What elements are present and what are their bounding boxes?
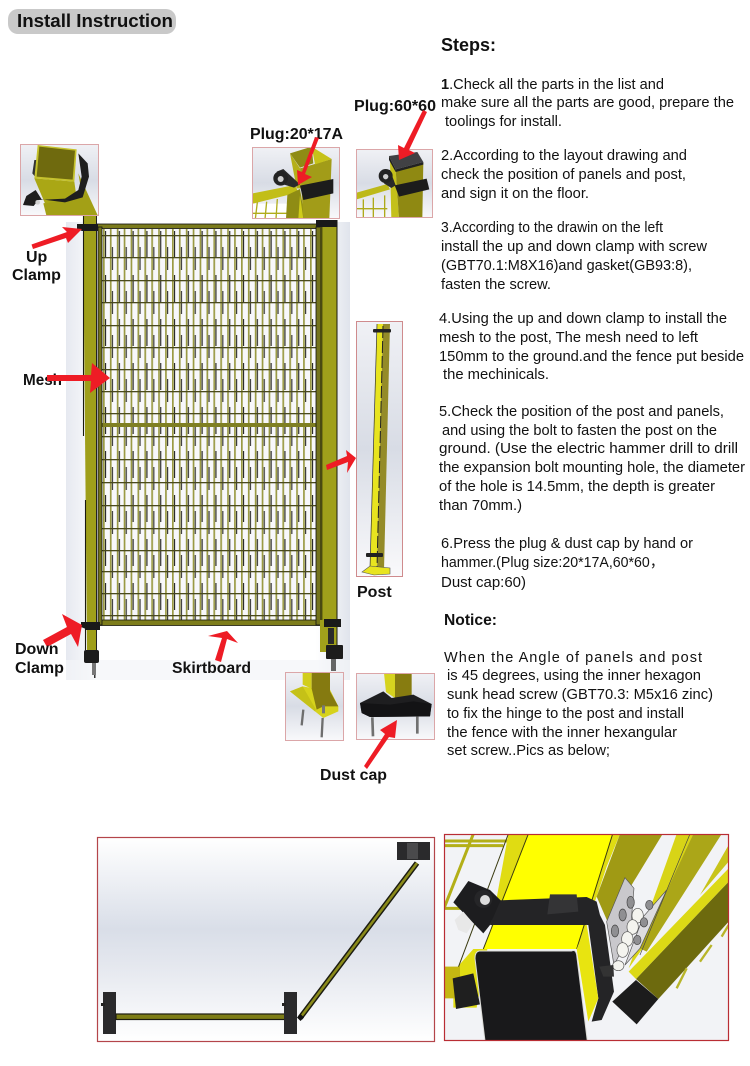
mid rail [99,423,320,427]
steps text block: make sure all the parts are good, prepare the [441,95,734,111]
notice text block: Notice: [444,612,497,629]
steps text block: fasten the screw. [441,277,551,293]
arrow: post [326,450,356,473]
panel: plug 60*60 detail [356,150,432,219]
label: Skirtboard: Skirtboard [172,660,251,677]
steps text block: 6.Press the plug & dust cap by hand or [441,536,693,552]
steps text block: the mechinicals. [443,367,549,383]
steps text block: 1.Check all the parts in the list and [441,77,664,93]
steps text block: 3.According to the drawin on the left [441,220,663,236]
panel: up clamp detail [20,144,98,217]
end cap [612,980,658,1024]
panel: skirtboard foot detail [286,672,344,740]
label: Up Clamp [12,249,61,284]
steps text block: hammer.(Plug size:20*17A,60*60， [441,555,664,571]
steps text block [439,35,745,591]
arrow: up clamp [32,227,82,249]
fence assembly drawing [77,216,343,678]
notice text block: When the Angle of panels and post [444,650,702,666]
middle post section [282,992,297,1034]
steps text block: 150mm to the ground.and the fence put beside [439,349,744,365]
top rail [97,224,322,228]
steps text block: and sign it on the floor. [441,186,589,202]
panel: plug 20*17A detail [252,147,340,220]
wire mesh [445,834,508,968]
fence backdrop [66,222,350,680]
panel: dust cap detail [356,673,434,740]
arrow: plug 20*17A [297,137,319,185]
clamp ear [453,881,501,933]
label: Down Clamp: Clamp [15,660,64,677]
notice text block: the fence with the inner hexangular [447,725,677,741]
yellow side of post under clamp [577,924,598,1022]
label: Down Clamp: Down [15,641,59,658]
hinge plates [607,878,634,965]
steps text block: 4.Using the up and down clamp to install the [439,311,727,327]
arrow: skirtboard [208,631,238,662]
skirtboard rail [100,620,322,626]
arrow: plug 60*60 [398,110,427,160]
third post [636,882,729,999]
straight fence plan [116,1014,285,1020]
label: Plug 20*17A: Plug:20*17A [250,126,343,143]
hinge screws [611,896,653,945]
label: Up Clamp: Up [26,249,48,266]
steps text block: mesh to the post, The mesh need to left [439,330,698,346]
steps text block: ground. (Use the electric hammer drill to drill [439,441,738,457]
notice text block [444,612,713,759]
steps text block: check the position of panels and post, [441,167,686,183]
screws [677,925,729,988]
arrow: mesh [47,363,110,393]
steps text block: of the hole is 14.5mm, the depth is greater [439,479,715,495]
clip [599,965,614,977]
panel: 45 degree layout plan [98,838,434,1042]
panel: hinge close-up photo [444,834,729,1041]
left post [77,216,100,678]
arrow: dust cap [364,720,397,769]
steps text block: toolings for install. [445,114,562,130]
up clamp [77,224,98,231]
steps text block: 5.Check the position of the post and panels, [439,404,724,420]
hinge knuckles [613,908,643,971]
down clamp [81,622,100,630]
steps text block: (GBT70.1:M8X16)and gasket(GB93:8), [441,258,692,274]
foot [84,650,99,663]
notice text block: set screw..Pics as below; [447,743,610,759]
steps text block: Dust cap:60) [441,575,526,591]
label: Up Clamp: Clamp [12,267,61,284]
notice text block: is 45 degrees, using the inner hexagon [447,668,701,684]
angled fence plan [300,863,417,1018]
steps text block: than 70mm.) [439,498,522,514]
left post section [101,992,116,1034]
lower-left black cap [453,973,480,1009]
arrow: down clamp [43,614,82,647]
main post faces [453,834,620,1008]
right post [316,220,343,671]
steps text block: 2.According to the layout drawing and [441,148,687,164]
panel: post [356,322,402,576]
label: Down Clamp [15,641,64,677]
label: Plug 60*60: Plug:60*60 [354,98,436,115]
steps text block: the expansion bolt mounting hole, the diameter [439,460,745,476]
black end cap [475,950,587,1041]
label: Dust cap: Dust cap [320,767,387,784]
heading: Install Instruction: Install Instruction [17,11,173,31]
post drawing [362,324,391,575]
notice text block: sunk head screw (GBT70.3: M5x16 zinc) [447,687,713,703]
label: Post: Post [357,584,392,601]
steps text block: Steps: [441,35,496,55]
top post section [397,842,430,860]
label: Mesh: Mesh [23,372,62,389]
steps text block: and using the bolt to fasten the post on the [442,423,717,439]
clamp band [490,897,614,1022]
notice text block: to fix the hinge to the post and install [447,706,684,722]
steps text block: install the up and down clamp with screw [441,239,708,255]
second post [629,834,693,968]
hinge dot [297,1014,304,1021]
mesh panel [97,224,322,626]
